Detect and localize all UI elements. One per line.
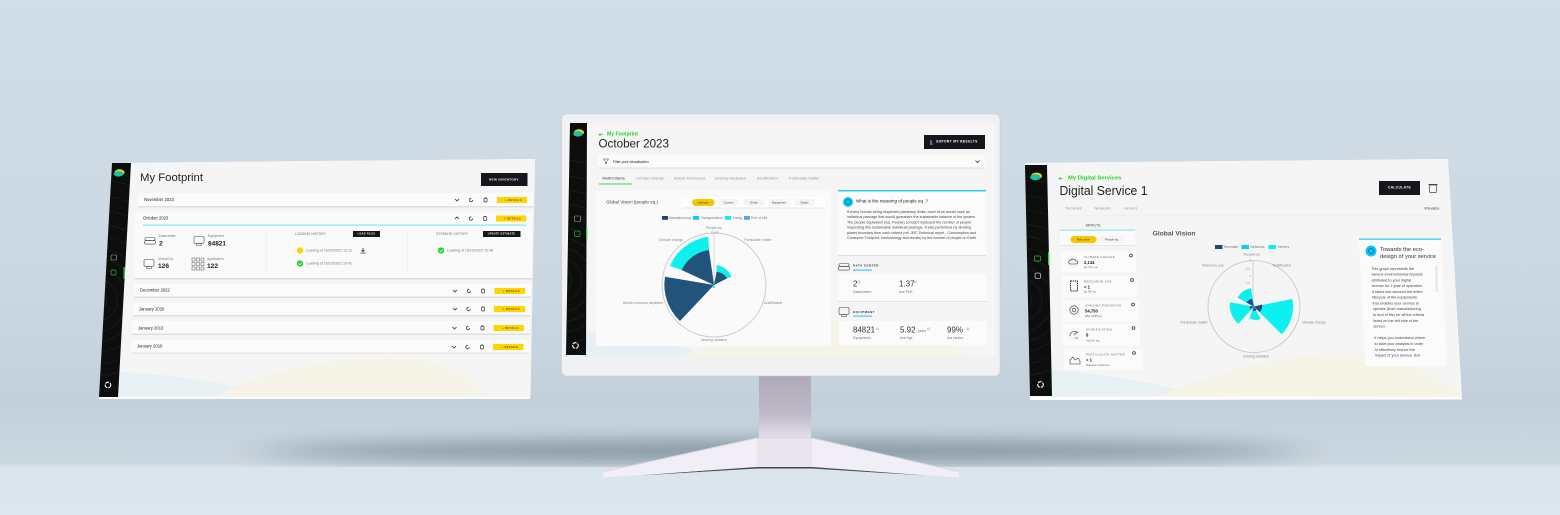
estimate history: Loading of 16/10/2023 10:48 — [447, 248, 493, 252]
radar chart: Particulate matter — [744, 238, 773, 242]
icon: trash — [1428, 184, 1438, 192]
filter bar — [598, 155, 985, 168]
tabs: Particulate Matter — [789, 176, 820, 180]
stat: application: 122 — [207, 263, 218, 270]
filter chips: Entity — [750, 200, 758, 204]
panel: meaning of people eq: If every human being respected planetary limits, each of us would have an — [847, 210, 970, 214]
impact card: climate change — [1061, 251, 1136, 272]
legend: Terminals — [1224, 245, 1238, 249]
impacts header: Raw value — [1077, 238, 1091, 242]
panel: towards eco-design: This graph represents the — [1371, 267, 1414, 271]
panel: global vision chart: Global Vision (people eq.) — [606, 200, 658, 204]
legend: Manufacturing — [669, 216, 691, 220]
section: equipment — [839, 308, 987, 346]
impact card: particulate matter: Disease incidence — [1086, 363, 1110, 367]
impacts header: People eq. — [1105, 238, 1119, 242]
impact card: ionising radiation: kBq U235 eq. — [1085, 314, 1103, 318]
tabs: Visualize — [1424, 206, 1440, 210]
section: data center: 1.37 — [899, 280, 915, 288]
panel: towards eco-design — [1359, 238, 1447, 366]
impact card: acidification: ACIDIFICATION — [1086, 327, 1112, 331]
radar chart — [623, 226, 782, 342]
panel: towards eco-design: service for 1 year of operation. — [1372, 284, 1423, 288]
impact card: acidification — [1063, 324, 1140, 346]
radar chart: Resource use — [1202, 264, 1224, 268]
section: equipment: Equipments — [853, 336, 871, 340]
impact card: climate change: CLIMATE CHANGE — [1084, 255, 1115, 259]
tabs: Multi-Criteria — [602, 176, 625, 180]
impact card: resource use: kg Sb eq. — [1084, 290, 1096, 294]
row: October 2023 expanded — [135, 212, 532, 280]
legend — [662, 216, 767, 220]
section: data center: Datacenters — [853, 290, 872, 294]
filter chips — [683, 197, 825, 208]
impact card: ionising radiation: IONISING RADIATION — [1085, 303, 1122, 307]
tabs: Climate Change — [636, 176, 664, 180]
panel: meaning of people eq: The people equivalent (Eq. People) concept represent the number of people — [847, 220, 971, 224]
section: equipment: 99% — [947, 326, 963, 334]
panel: meaning of people eq: respecting this sustainable individual package. It was performed by dividing — [847, 226, 971, 230]
panel: My Footprint screen — [99, 159, 535, 399]
radar chart: 1.5 — [1246, 281, 1250, 285]
loading history: LOADING HISTORY — [295, 232, 327, 236]
back link: My Footprint — [607, 132, 638, 138]
stat: equipment — [194, 234, 226, 248]
row: January 2013: + DETAILS — [502, 326, 519, 330]
row: January 2010: January 2010 — [137, 344, 163, 348]
tabs — [599, 176, 820, 184]
row: November 2023: November 2023 — [144, 197, 174, 202]
panel: towards eco-design: design of your service — [1380, 254, 1436, 260]
panel: towards eco-design: to effectively reduce the — [1375, 348, 1415, 352]
section: equipment: years — [918, 329, 927, 333]
loading history: Loading of 16/10/2022 10:12 — [306, 248, 352, 252]
radar chart: Ionizing radiation — [1243, 354, 1269, 358]
panel: meaning of people eq: planet boundary from each criteria (ref. JRC Technical report - Consumption and — [847, 231, 976, 235]
button: calculate: CALCULATE — [1388, 186, 1411, 190]
button: export: EXPORT MY RESULTS — [936, 140, 978, 144]
filter chips: Status — [800, 200, 809, 204]
button: new inventory: NEW INVENTORY — [489, 178, 519, 182]
panel: towards eco-design: to end of life) for all the criteria — [1373, 313, 1425, 317]
stat: datacenter: 2 — [159, 240, 163, 248]
monitor stand — [603, 376, 959, 478]
row: January 2013: January 2013 — [138, 326, 164, 330]
row: November 2023: + DETAILS — [505, 198, 522, 202]
estimate history: ESTIMATE HISTORY — [436, 232, 469, 236]
tabs: Servers — [1124, 206, 1137, 210]
impact card: resource use: < 1 — [1084, 284, 1091, 290]
button: calculate — [1379, 181, 1420, 195]
sidebar — [1025, 165, 1052, 396]
radar chart: Abiotic resource depletion — [623, 301, 663, 305]
radar chart: 3 — [1249, 258, 1251, 262]
stat: virtual eq: 126 — [158, 263, 169, 270]
floor shadow — [260, 440, 1300, 462]
panel: meaning of people eq: Consumer Footprint, methodology and results) by the number of people on Earth. — [847, 236, 977, 240]
row: January 2010: + DETAILS — [502, 345, 518, 349]
row: January 2020 — [133, 303, 530, 316]
impact card: particulate matter: < 1 — [1086, 358, 1093, 362]
impact card: ionising radiation — [1062, 300, 1139, 322]
estimate history — [436, 231, 520, 254]
tabs: Ionizing Radiation — [715, 176, 746, 180]
impact card: climate change: kg CO₂ eq. — [1084, 265, 1098, 269]
loading history: LOAD FILES — [358, 232, 375, 236]
legend: Transportation — [701, 216, 723, 220]
impacts header: IMPACTS — [1086, 224, 1101, 228]
row: January 2013 — [132, 321, 530, 335]
stat: virtual eq: Virtual Eq. — [158, 257, 174, 261]
stat: application: Application — [207, 257, 224, 261]
filter chips: Lifecycle — [697, 200, 709, 204]
radar chart: Climate change — [1302, 320, 1326, 324]
panel: towards eco-design: Towards the eco- — [1380, 247, 1424, 253]
section: equipment: low carbon — [947, 336, 964, 340]
row: January 2020: + DETAILS — [503, 307, 520, 311]
loading history — [295, 231, 380, 267]
section: data center — [838, 264, 987, 302]
row: December 2022: + DETAILS — [503, 289, 520, 293]
row: December 2022 — [134, 284, 531, 298]
panel: towards eco-design: screen. — [1374, 324, 1386, 328]
row: January 2010 — [131, 340, 529, 354]
radar chart: 2.5 — [1246, 266, 1250, 270]
loading history: Loading of 16/10/2022 10:42 — [306, 262, 352, 266]
radar chart: Particulate matter — [1180, 320, 1209, 324]
stat: equipment: Equipment — [208, 234, 224, 238]
impacts header — [1060, 224, 1136, 246]
panel: towards eco-design: lifecycle of the equipments — [1372, 296, 1417, 300]
radar chart: Acidification — [764, 301, 782, 305]
panel: meaning of people eq: individual package that would guarantee the sustainable balance of the system. — [847, 215, 976, 219]
radar chart: People eq. — [706, 226, 722, 230]
monitor frame — [562, 114, 1000, 376]
impact card: climate change: 2,134 — [1084, 260, 1095, 265]
impact card: particulate matter: PARTICULATE MATTER — [1086, 352, 1125, 356]
heading: global vision: Global Vision — [1152, 230, 1196, 238]
radar chart: 2 — [1249, 274, 1251, 278]
title: Digital Service 1 — [1060, 184, 1148, 198]
row: October 2023 expanded: October 2023 — [143, 216, 169, 220]
impact card: acidification: 8 — [1086, 332, 1089, 338]
row: January 2020: January 2020 — [139, 306, 165, 312]
stat: datacenter — [144, 234, 176, 248]
radar chart: 12,000 — [711, 230, 719, 234]
filter bar: Filter your visualisation — [613, 160, 649, 164]
tabs: Terminals — [1065, 206, 1082, 210]
radar chart: Acidification — [1273, 264, 1291, 268]
sidebar — [566, 123, 588, 355]
panel: towards eco-design: It helps you understand where — [1374, 336, 1425, 340]
row: November 2023 — [138, 193, 533, 208]
section: equipment: Ave Age — [900, 336, 913, 340]
title: My Footprint — [140, 172, 203, 184]
stat: equipment: 84821 — [208, 240, 226, 248]
panel: towards eco-design: It takes into account the entire — [1372, 290, 1423, 294]
section: data center: DATA CENTER — [853, 264, 879, 268]
panel: Digital Service 1 screen — [1025, 159, 1462, 400]
tabs: Networks — [1094, 206, 1111, 210]
radar chart: Climate change — [659, 238, 683, 242]
section: data center: 2 — [853, 280, 858, 288]
panel: towards eco-design: that enables your service to — [1372, 302, 1419, 306]
section: data center: Ave PUE — [899, 290, 913, 294]
estimate history: UPDATE ESTIMATE — [488, 232, 515, 236]
panel: towards eco-design: impact of your service. But — [1375, 354, 1421, 358]
title: October 2023 — [598, 138, 669, 150]
panel: towards eco-design: operate (from manufacturing — [1373, 307, 1421, 311]
radar chart — [1180, 252, 1326, 358]
row: October 2023 expanded: + DETAILS — [504, 216, 521, 220]
tabs — [1060, 206, 1445, 215]
impact card: resource use: RESOURCE USE — [1084, 279, 1112, 283]
radar chart: Ionizing radiation — [701, 338, 727, 342]
panel: towards eco-design: attributed to your digital — [1372, 278, 1411, 282]
back link: My Digital Services — [1068, 176, 1122, 182]
panel: global vision chart — [596, 191, 831, 346]
legend: End of Life — [751, 216, 767, 220]
impact card: acidification: mol H+ eq. — [1086, 338, 1100, 342]
panel: towards eco-design: to start your analysis in order — [1374, 342, 1424, 346]
section: equipment: EQUIPMENT — [853, 310, 875, 314]
section: equipment: 5.92 — [900, 326, 916, 334]
button: new inventory — [481, 173, 528, 186]
panel: towards eco-design: listed on the left side of the — [1373, 319, 1418, 323]
stat: datacenter: Datacenter — [159, 234, 176, 238]
tabs: Acidification — [757, 176, 778, 180]
legend: Servers — [1278, 245, 1289, 249]
sidebar — [99, 163, 131, 397]
panel: meaning of people eq — [838, 190, 986, 256]
legend: Networks — [1250, 245, 1265, 249]
row: December 2022: December 2022 — [140, 288, 170, 292]
impact card: particulate matter — [1064, 349, 1142, 370]
section: equipment: 84821 — [853, 326, 876, 334]
legend — [1215, 245, 1289, 249]
legend: Using — [733, 216, 742, 220]
impact card: resource use — [1062, 276, 1137, 297]
filter chips: Country — [723, 200, 734, 204]
button: export — [924, 135, 985, 149]
panel: meaning of people eq: What is the meaning of people eq. ? — [856, 198, 929, 204]
tabs: Abiotic Resources — [674, 176, 705, 180]
filter chips: Equipment — [772, 200, 786, 204]
impact card: ionising radiation: 54,750 — [1085, 308, 1098, 314]
panel: towards eco-design: various environmental impacts — [1371, 273, 1423, 277]
panel: October 2023 screen — [566, 123, 987, 357]
radar chart: People eq. — [1244, 252, 1260, 256]
stat: application — [192, 257, 224, 270]
stat: virtual eq — [144, 257, 174, 270]
